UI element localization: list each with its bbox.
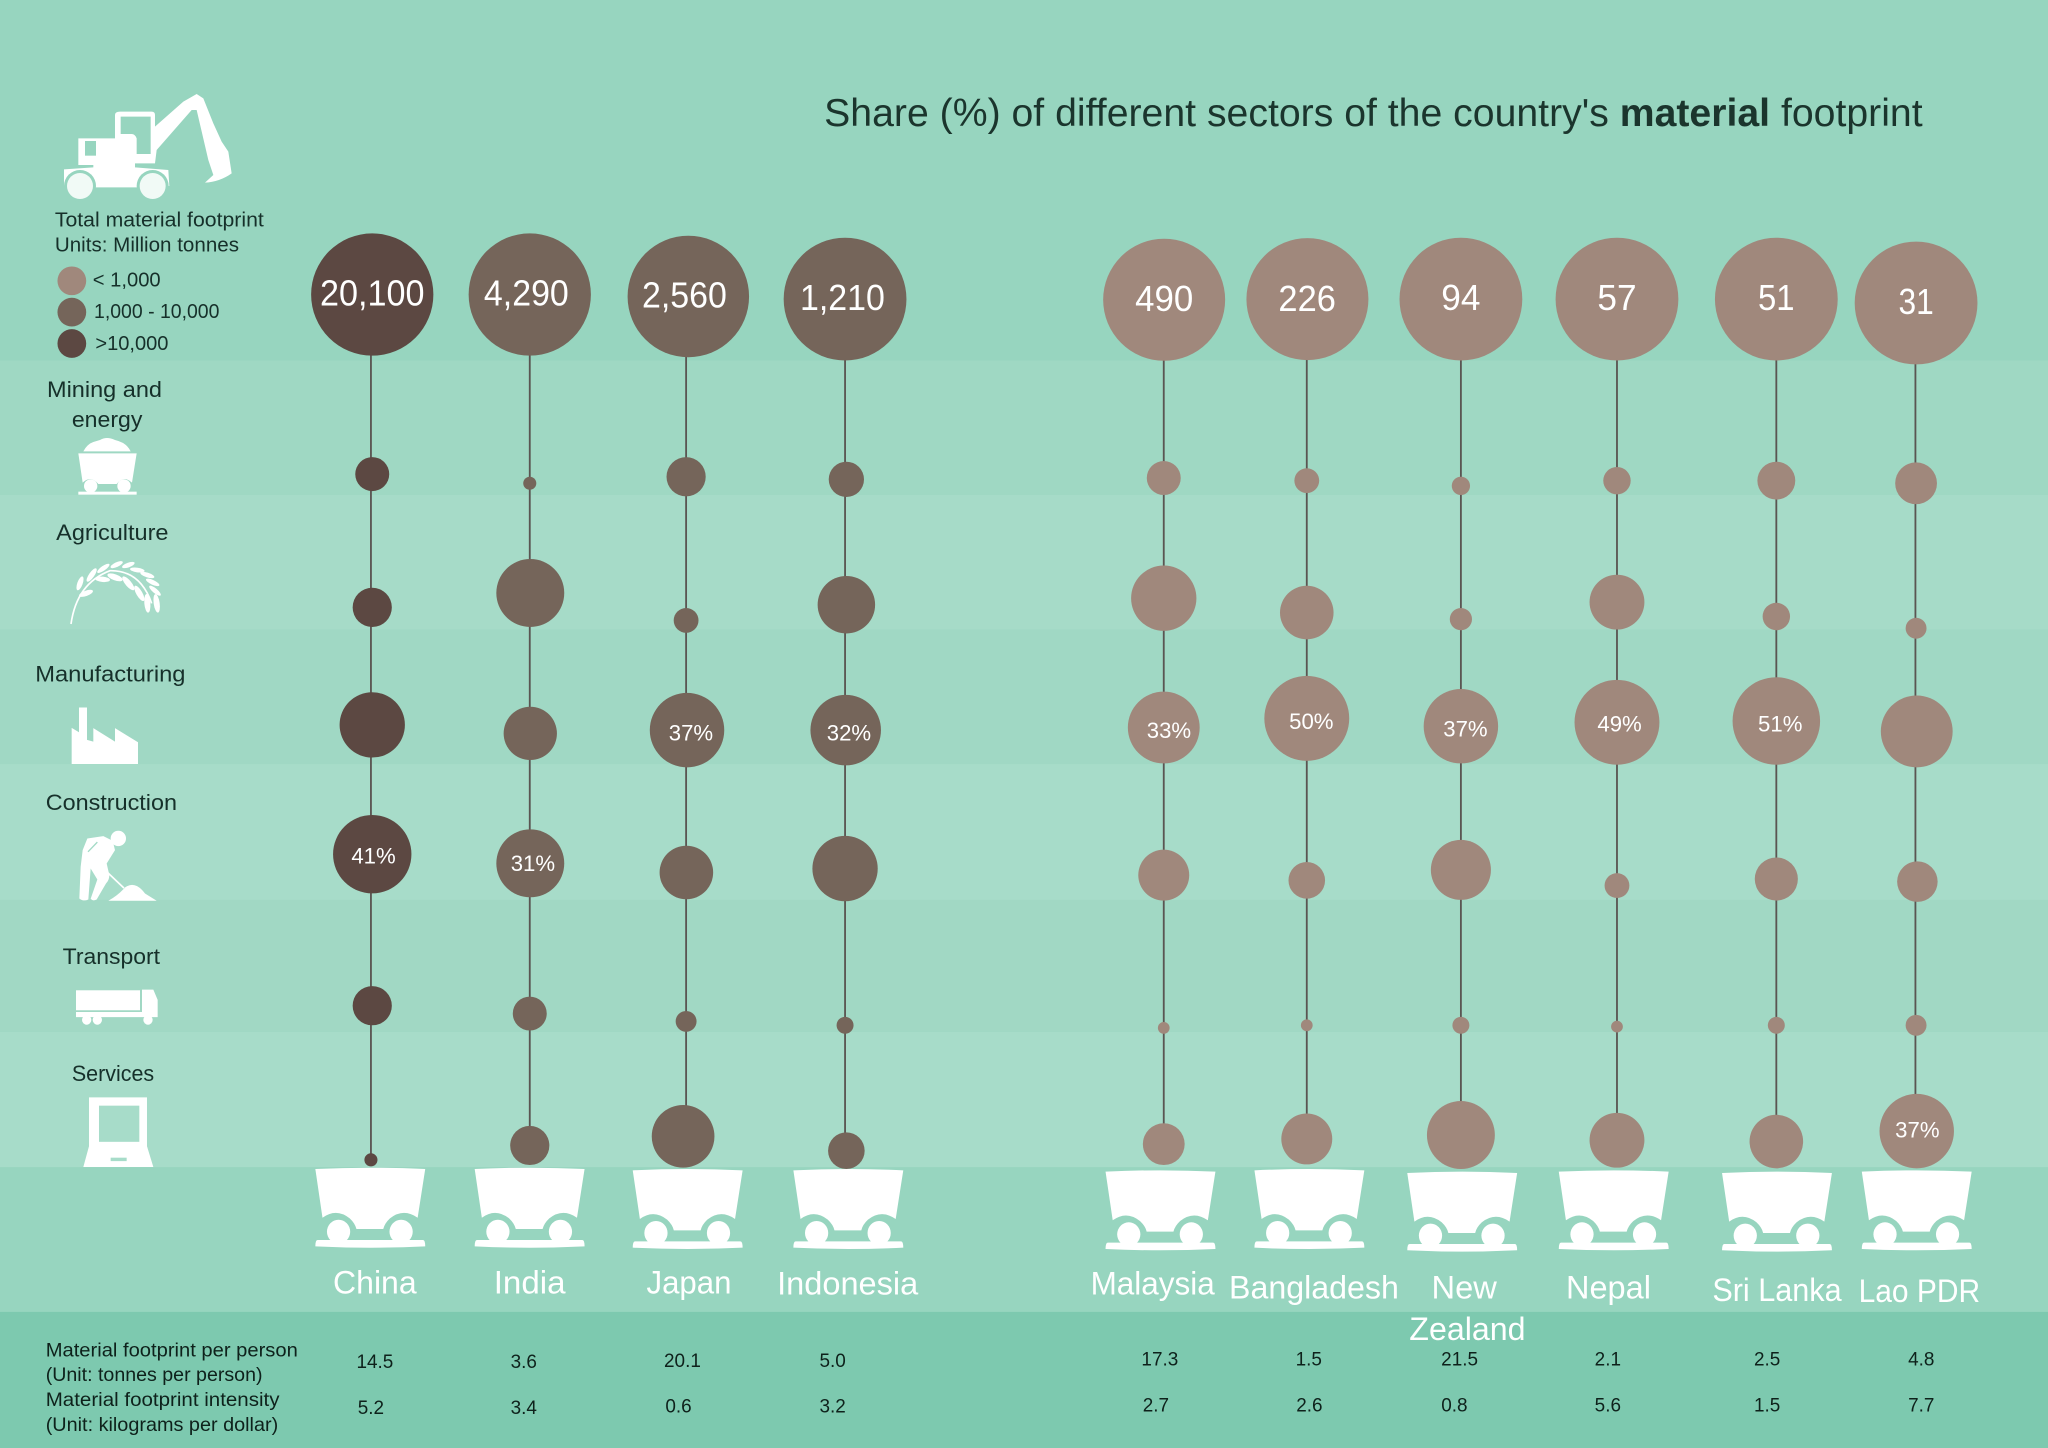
sector label: transport: Transport <box>63 944 160 969</box>
table: footprint intensity: 7.7 <box>1908 1395 1934 1416</box>
icon: mining cart <box>78 438 137 495</box>
column: New Zealand <box>1400 238 1522 1169</box>
manufacturing share: New Zealand: 37% <box>1443 717 1488 742</box>
construction share: India <box>496 829 564 897</box>
sector label: mining and energy: energy <box>72 407 143 432</box>
table: footprint per person: 5.0 <box>819 1351 846 1372</box>
total: Sri Lanka <box>1715 238 1838 360</box>
table: footprint per person: 21.5 <box>1441 1350 1478 1371</box>
construction share: India: 31% <box>511 851 555 876</box>
icon: excavator <box>64 94 232 202</box>
total: Nepal: 57 <box>1597 277 1637 318</box>
icon: laptop <box>83 1097 153 1167</box>
icon: factory <box>72 708 138 764</box>
table row labels <box>46 1339 298 1436</box>
column: China <box>311 233 433 1166</box>
manufacturing share: Indonesia: 32% <box>827 721 871 746</box>
table: footprint intensity: 0.6 <box>665 1397 692 1418</box>
total: Japan: 2,560 <box>642 275 727 316</box>
manufacturing share: Nepal: 49% <box>1597 711 1642 736</box>
total: Nepal <box>1556 238 1678 360</box>
construction share: China: 41% <box>351 843 396 868</box>
title: Share (%) of different sectors of the country's material footprint <box>824 92 1923 135</box>
table: footprint intensity: 2.6 <box>1296 1395 1323 1416</box>
table: footprint intensity: 1.5 <box>1754 1395 1780 1416</box>
table: footprint per person: 1.5 <box>1296 1350 1322 1371</box>
table: footprint per person <box>356 1350 1934 1373</box>
total: Lao PDR: 31 <box>1898 281 1934 322</box>
legend: total material footprint: < 1,000 <box>93 270 161 292</box>
table: footprint intensity: 5.2 <box>358 1398 384 1419</box>
manufacturing share: Bangladesh: 50% <box>1289 709 1334 734</box>
table: footprint per person: 2.5 <box>1754 1350 1780 1371</box>
manufacturing share: Nepal <box>1575 680 1659 765</box>
table: footprint intensity: 0.8 <box>1441 1395 1468 1416</box>
column: Japan <box>628 236 749 1168</box>
table: footprint per person: 3.6 <box>511 1352 537 1373</box>
sector label: services: Services <box>72 1061 154 1086</box>
services share: Lao PDR <box>1880 1094 1954 1168</box>
construction share: China <box>333 815 411 893</box>
total: New Zealand: 94 <box>1441 277 1480 318</box>
column: Bangladesh <box>1246 238 1368 1164</box>
manufacturing share: Malaysia <box>1128 692 1200 763</box>
total: Indonesia: 1,210 <box>800 277 885 318</box>
table: footprint intensity: 3.2 <box>819 1397 846 1418</box>
total: China: 20,100 <box>320 273 424 314</box>
table: footprint intensity <box>358 1395 1934 1419</box>
column: Sri Lanka <box>1715 238 1838 1168</box>
manufacturing share: Japan: 37% <box>669 721 713 746</box>
table: footprint per person: 2.1 <box>1595 1350 1621 1371</box>
country names: Japan <box>647 1264 731 1301</box>
icon: construction worker <box>79 831 157 901</box>
manufacturing share: Bangladesh <box>1264 676 1349 761</box>
total: India <box>469 233 591 356</box>
legend: total material footprint: >10,000 <box>95 333 168 355</box>
sector label: mining and energy: Mining and <box>47 377 162 402</box>
column: Nepal <box>1556 238 1678 1168</box>
country names: China <box>333 1264 417 1301</box>
column: Lao PDR <box>1855 242 1977 1168</box>
table: footprint intensity: 2.7 <box>1143 1395 1169 1416</box>
country names <box>333 1264 1980 1347</box>
table row labels: (Unit: kilograms per dollar) <box>46 1414 278 1436</box>
total: China <box>311 233 433 356</box>
manufacturing share: Sri Lanka <box>1733 677 1820 765</box>
legend: total material footprint: 1,000 - 10,000 <box>94 301 219 323</box>
sector label: agriculture: Agriculture <box>56 520 168 545</box>
services share: Lao PDR: 37% <box>1895 1118 1940 1143</box>
table: footprint intensity: 5.6 <box>1595 1395 1621 1416</box>
table: footprint per person: 20.1 <box>664 1351 701 1372</box>
legend: total material footprint: Units: Million tonnes <box>55 235 239 257</box>
total: Lao PDR <box>1855 242 1977 364</box>
total: Bangladesh: 226 <box>1278 278 1336 319</box>
legend: total material footprint: Total material footprint <box>55 210 264 232</box>
table: footprint per person: 17.3 <box>1141 1350 1178 1371</box>
table row labels: Material footprint intensity <box>46 1389 280 1411</box>
manufacturing share: Malaysia: 33% <box>1147 718 1191 743</box>
manufacturing share: Sri Lanka: 51% <box>1758 711 1802 736</box>
legend: total material footprint <box>55 210 264 358</box>
country names: Lao PDR <box>1859 1272 1980 1309</box>
country names: Zealand <box>1409 1310 1526 1347</box>
total: Japan <box>628 236 749 357</box>
icon: wheat <box>71 560 162 624</box>
table row labels: (Unit: tonnes per person) <box>46 1364 263 1386</box>
column: Malaysia <box>1103 239 1225 1165</box>
total: Malaysia <box>1103 239 1225 361</box>
icon: truck <box>76 990 158 1025</box>
total: India: 4,290 <box>484 273 569 314</box>
country names: Indonesia <box>777 1264 919 1301</box>
carts row <box>315 1168 1972 1252</box>
column: Indonesia <box>784 238 906 1169</box>
column: India <box>469 233 591 1165</box>
country names: India <box>494 1264 566 1301</box>
table: footprint intensity: 3.4 <box>511 1398 537 1419</box>
country names: Malaysia <box>1091 1264 1216 1301</box>
total: Sri Lanka: 51 <box>1758 277 1795 318</box>
country names: Sri Lanka <box>1712 1271 1842 1308</box>
table: footprint per person: 14.5 <box>356 1352 393 1373</box>
total: Bangladesh <box>1246 238 1368 360</box>
manufacturing share: New Zealand <box>1424 689 1498 763</box>
total: Malaysia: 490 <box>1135 278 1193 319</box>
country names: Bangladesh <box>1229 1268 1399 1305</box>
sector label: construction: Construction <box>46 790 177 815</box>
table row labels: Material footprint per person <box>46 1339 298 1361</box>
country names: Nepal <box>1566 1268 1651 1305</box>
country names: New <box>1432 1268 1497 1305</box>
total: New Zealand <box>1400 238 1522 360</box>
manufacturing share: Japan <box>650 693 724 767</box>
total: Indonesia <box>784 238 906 360</box>
sector label: mining and energy <box>47 377 162 432</box>
sector label: manufacturing: Manufacturing <box>35 661 185 686</box>
table: footprint per person: 4.8 <box>1908 1350 1934 1371</box>
manufacturing share: Indonesia <box>810 695 881 765</box>
